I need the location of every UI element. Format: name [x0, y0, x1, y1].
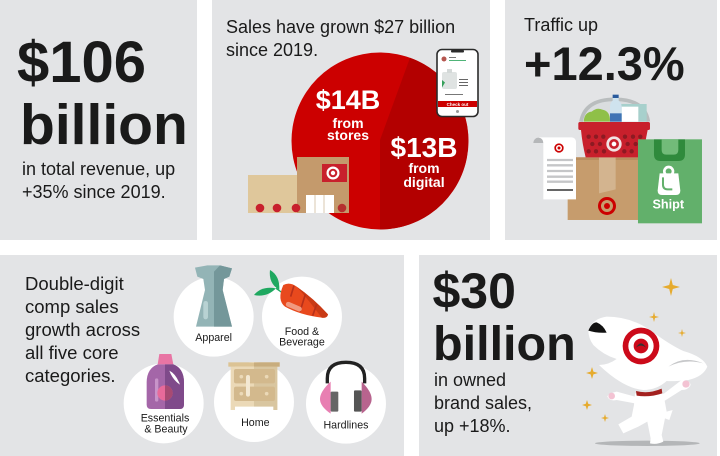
text: owned brand description: up +18%. — [434, 416, 511, 436]
icon: cardboard box — [568, 157, 638, 220]
label: $13B from digital — [391, 132, 457, 190]
category: home: Home — [241, 417, 270, 429]
text: double-digit comp sales: all five core — [25, 342, 119, 363]
text: sales heading: Sales have grown $27 billion — [226, 17, 455, 37]
heading: $106 billion — [17, 30, 188, 157]
category: hardlines — [306, 362, 386, 444]
category: food and beverage: Food & — [285, 326, 319, 338]
icon: gold sparkles — [582, 278, 686, 422]
text: revenue description: +35% since 2019. — [22, 182, 166, 202]
label: $14B from stores — [316, 85, 380, 143]
heading: $30 billion: billion — [433, 317, 576, 371]
panel: total revenue — [0, 0, 197, 240]
panel: owned brands — [419, 255, 717, 456]
category: apparel: Apparel — [195, 332, 232, 344]
label: $13B from digital: $13B — [391, 132, 457, 163]
text: double-digit comp sales: growth across — [25, 319, 140, 340]
heading: +12.3%: +12.3% — [524, 37, 685, 90]
panel: sales growth — [212, 0, 490, 240]
icon: bullseye dog mascot — [588, 317, 707, 446]
text: double-digit comp sales: comp sales — [25, 296, 119, 317]
category: essentials and beauty: & Beauty — [144, 423, 188, 435]
category: home — [214, 362, 294, 442]
label: $13B from digital: from — [408, 160, 440, 176]
panel: traffic — [505, 0, 717, 240]
category: food and beverage: Beverage — [279, 337, 325, 349]
category: essentials and beauty — [124, 354, 204, 443]
panel: categories — [0, 255, 404, 456]
label: $13B from digital: digital — [403, 174, 445, 190]
category: apparel — [174, 265, 254, 357]
heading: $30 billion: $30 — [432, 263, 516, 319]
icon: phone with checkout: Check out — [447, 102, 469, 107]
text: revenue description: in total revenue, up — [22, 159, 175, 179]
icon: basket with groceries — [578, 95, 650, 157]
heading: $106 billion: $106 — [17, 30, 146, 95]
icon: target store — [248, 157, 349, 213]
category: hardlines: Hardlines — [323, 419, 368, 431]
text: traffic up: Traffic up — [524, 15, 598, 35]
text: owned brand description: in owned — [434, 370, 506, 390]
text: owned brand description: brand sales, — [434, 393, 532, 413]
category: essentials and beauty: Essentials — [141, 413, 189, 425]
icon: shipt bag: Shipt — [652, 198, 685, 212]
label: $14B from stores: $14B — [316, 85, 380, 115]
icon: phone with checkout — [437, 50, 478, 116]
icon: shipt bag — [638, 139, 702, 223]
label: $14B from stores: stores — [327, 127, 369, 143]
text: double-digit comp sales: categories. — [25, 365, 116, 386]
label: $14B from stores: from — [332, 115, 364, 131]
icon: receipt — [533, 137, 576, 199]
category: food and beverage — [254, 270, 342, 357]
heading: $30 billion — [432, 263, 576, 371]
heading: $106 billion: billion — [20, 93, 188, 157]
pie chart: stores vs digital — [292, 52, 468, 230]
text: sales heading: since 2019. — [226, 40, 318, 60]
text: double-digit comp sales: Double-digit — [25, 273, 124, 294]
